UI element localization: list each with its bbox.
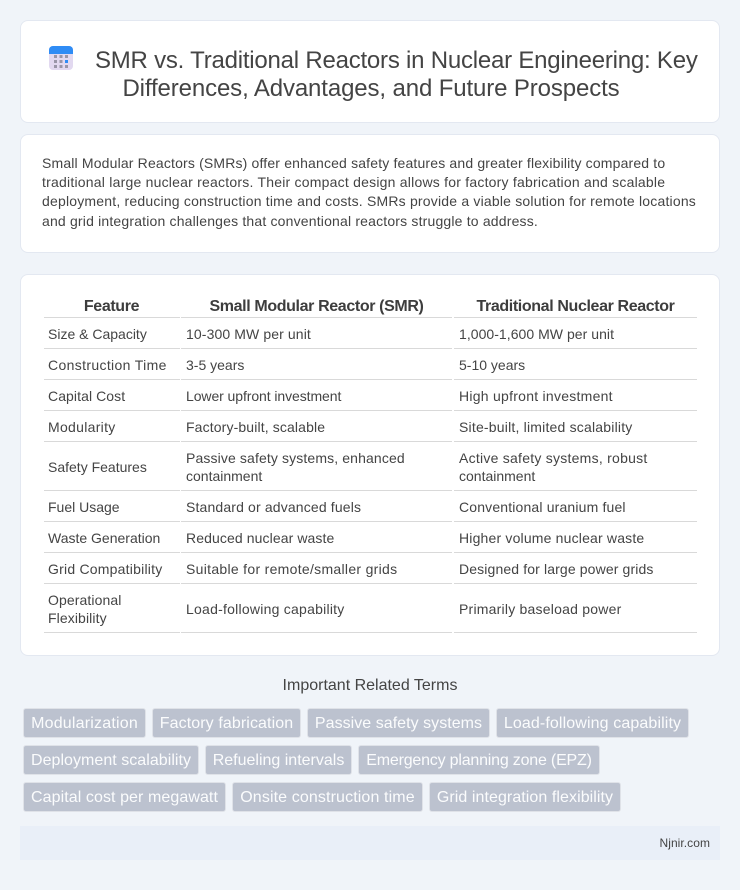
row: grid compatibility: Grid Compatibility <box>48 561 162 577</box>
row: construction time: 5-10 years <box>459 357 525 373</box>
row: size and capacity: 10-300 MW per unit <box>186 326 311 342</box>
title text <box>95 47 698 102</box>
table header: Traditional Nuclear Reactor <box>476 298 675 315</box>
row: operational flexibility: Flexibility <box>48 610 107 626</box>
row: modularity: Modularity <box>48 419 116 435</box>
row: modularity: Site-built, limited scalability <box>459 419 632 435</box>
panel: introduction paragraph: Small Modular Reactors (SMRs) offer enhanced safety features and greater flexibility compared to <box>42 155 665 171</box>
row: safety features: Active safety systems, robust <box>459 450 648 466</box>
panel: related term chips: Passive safety systems <box>315 715 482 732</box>
row: operational flexibility: Load-following capability <box>186 601 345 617</box>
row: grid compatibility: Designed for large power grids <box>459 561 654 577</box>
row: size and capacity: Size & Capacity <box>48 326 147 342</box>
panel: introduction paragraph <box>20 134 720 253</box>
row: fuel usage: Standard or advanced fuels <box>186 499 361 515</box>
row: construction time: 3-5 years <box>186 357 244 373</box>
table header: Small Modular Reactor (SMR) <box>209 298 424 315</box>
panel: related term chips <box>23 708 689 812</box>
row: operational flexibility <box>48 592 622 626</box>
row: construction time <box>48 357 525 373</box>
panel: title header <box>20 20 720 123</box>
panel: introduction paragraph: deployment, reducing construction time and costs. SMRs provide a viable solution for remote locations <box>42 193 696 209</box>
footer: Njnir.com <box>660 836 710 850</box>
row: waste generation: Reduced nuclear waste <box>186 530 334 546</box>
panel: comparison table <box>20 274 720 656</box>
row: waste generation <box>48 530 644 546</box>
row: waste generation: Waste Generation <box>48 530 160 546</box>
row: modularity <box>48 419 632 435</box>
panel: related term chips: Emergency planning zone (EPZ) <box>366 752 592 769</box>
row: fuel usage: Fuel Usage <box>48 499 120 515</box>
panel: related term chips: Modularization <box>31 715 138 732</box>
title text: SMR vs. Traditional Reactors in Nuclear Engineering: Key <box>95 47 698 74</box>
panel: introduction paragraph: and grid integration challenges that conventional reactors struggle to address. <box>42 213 538 229</box>
row: capital cost: High upfront investment <box>459 388 613 404</box>
row: size and capacity <box>48 326 614 342</box>
panel: related term chips: Onsite construction time <box>240 789 415 806</box>
row: capital cost: Lower upfront investment <box>186 388 341 404</box>
row: fuel usage: Conventional uranium fuel <box>459 499 626 515</box>
table header <box>84 298 675 315</box>
table header: Feature <box>84 298 139 315</box>
footer <box>20 826 720 860</box>
row: size and capacity: 1,000-1,600 MW per unit <box>459 326 614 342</box>
heading: important related terms: Important Related Terms <box>283 677 457 694</box>
row: operational flexibility: Operational <box>48 592 121 608</box>
panel: related term chips: Capital cost per megawatt <box>31 789 218 806</box>
row: grid compatibility <box>48 561 654 577</box>
panel: related term chips: Factory fabrication <box>160 715 293 732</box>
icon: calendar <box>49 46 73 70</box>
panel: introduction paragraph: traditional large nuclear reactors. Their compact design allows for factory fabrication and scalable <box>42 174 665 190</box>
row: operational flexibility: Primarily baseload power <box>459 601 621 617</box>
panel: related term chips: Deployment scalability <box>31 752 191 769</box>
row: waste generation: Higher volume nuclear waste <box>459 530 644 546</box>
panel: related term chips: Load-following capability <box>504 715 681 732</box>
row: capital cost <box>48 388 613 404</box>
row: capital cost: Capital Cost <box>48 388 125 404</box>
title text: Differences, Advantages, and Future Prospects <box>122 75 620 102</box>
row: safety features: Safety Features <box>48 459 147 475</box>
row: grid compatibility: Suitable for remote/smaller grids <box>186 561 397 577</box>
row: safety features: containment <box>186 468 262 484</box>
row: safety features <box>48 450 648 484</box>
row: safety features: containment <box>459 468 535 484</box>
row: fuel usage <box>48 499 626 515</box>
panel: related term chips: Grid integration flexibility <box>437 789 613 806</box>
row: safety features: Passive safety systems, enhanced <box>186 450 405 466</box>
row: construction time: Construction Time <box>48 357 167 373</box>
panel: related term chips: Refueling intervals <box>213 752 344 769</box>
row: modularity: Factory-built, scalable <box>186 419 325 435</box>
